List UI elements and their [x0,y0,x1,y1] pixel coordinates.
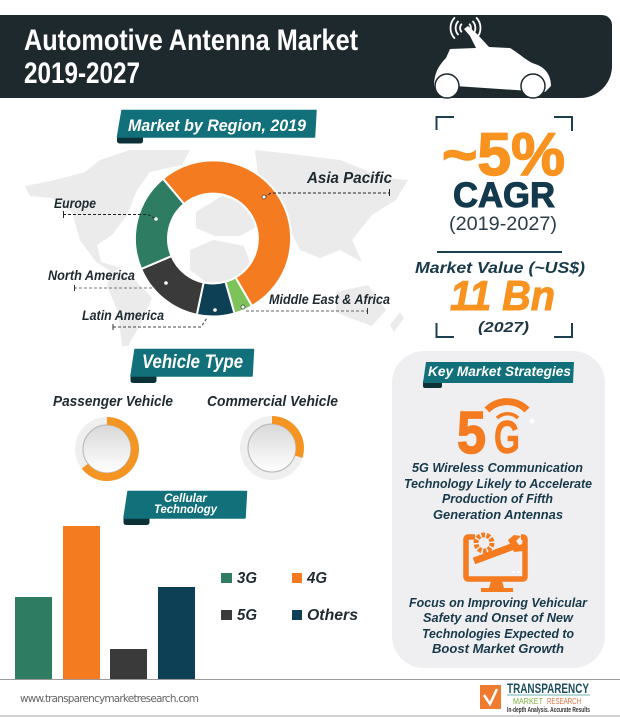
label: Commercial Vehicle: Commercial Vehicle [207,393,338,410]
legend item: Others: Others [307,607,358,624]
label: Europe [54,196,158,221]
panel: key market strategies [392,351,605,668]
icon: 5G signal: G [494,411,520,463]
ring chart: Commercial Vehicle [240,416,304,480]
CAGR value: ~5% [442,121,565,188]
market value year: (2027) [478,319,529,336]
logo: Transparency Market Research: RESEARCH [547,696,581,706]
legend item: 5G: 5G [237,607,257,624]
bar chart: cellular technology [15,526,195,679]
logo: Transparency Market Research: TRANSPARENCY [507,680,589,696]
stat panel: CAGR and market value [415,117,585,337]
segment: Latin America [197,282,234,317]
CAGR period: (2019-2027) [449,214,557,235]
bar: 5G [110,649,147,679]
CAGR label: CAGR [453,176,555,215]
heading: Cellular Technology: Technology [154,504,218,516]
segment: Asia Pacific [163,160,291,306]
heading: Cellular Technology: Cellular [164,493,208,505]
logo: Transparency Market Research [480,680,590,714]
icon: monitor with gear and wrench [466,531,526,592]
text: 5G strategy: Technology Likely to Accelerate [404,476,592,491]
bar: 4G [63,526,100,679]
segment: North America [141,256,204,315]
footer rule top [0,678,620,680]
market value label: Market Value (~US$) [415,260,585,277]
icon: 5G signal [457,400,534,466]
text: 5G strategy [404,460,592,522]
label: Asia Pacific [262,170,392,199]
market value: 11 Bn [450,272,555,319]
heading: Vehicle Type [130,350,254,383]
legend [221,570,358,624]
text: safety strategy: Safety and Onset of New [423,610,574,625]
heading: Cellular Technology [124,492,246,525]
bar: 3G [15,597,52,679]
heading: Key Market Strategies [423,362,574,388]
text: safety strategy: Technologies Expected to [422,626,574,641]
donut chart: market by region [135,160,291,317]
title [24,24,358,90]
text: 5G strategy: Generation Antennas [433,507,563,522]
logo: Transparency Market Research: MARKET [513,696,543,706]
text: safety strategy [409,595,588,656]
text: safety strategy: Boost Market Growth [432,641,564,656]
ring chart: Passenger Vehicle [75,417,139,481]
label: North America [48,268,168,291]
icon: 5G signal: 5 [457,400,486,466]
label: North America: North America [48,268,135,283]
heading: Market by Region [117,110,316,144]
segment: Middle East & Africa [225,278,252,314]
heading: Market by Region: Market by Region, 2019 [128,116,307,135]
text: 5G strategy: 5G Wireless Communication [412,460,583,475]
label: Europe: Europe [54,196,96,211]
legend item: 4G: 4G [306,570,327,587]
label: Latin America: Latin America [82,308,164,323]
title: 2019-2027 [24,57,140,90]
heading: Key Market Strategies: Key Market Strategies [428,363,571,379]
title: Automotive Antenna Market [24,24,358,57]
footer rule bottom [0,715,620,717]
legend item: 3G: 3G [237,570,257,587]
bar: Others [158,587,195,679]
segment: Europe [135,179,184,269]
footer url: www.transparencymarketresearch.com [20,693,199,705]
corner brackets [436,117,572,337]
heading: Vehicle Type: Vehicle Type [142,352,243,373]
icon: car with antenna [434,17,551,98]
text: 5G strategy: Production of Fifth [442,491,553,506]
label: Middle East & Africa [241,292,390,314]
label: Middle East & Africa: Middle East & Africa [269,292,390,307]
label: Passenger Vehicle: Passenger Vehicle [53,393,173,410]
header band [0,15,612,98]
text: safety strategy: Focus on Improving Vehicular [409,595,588,610]
world map background [25,150,408,346]
label: Latin America [82,308,217,330]
label: Asia Pacific: Asia Pacific [306,170,392,187]
